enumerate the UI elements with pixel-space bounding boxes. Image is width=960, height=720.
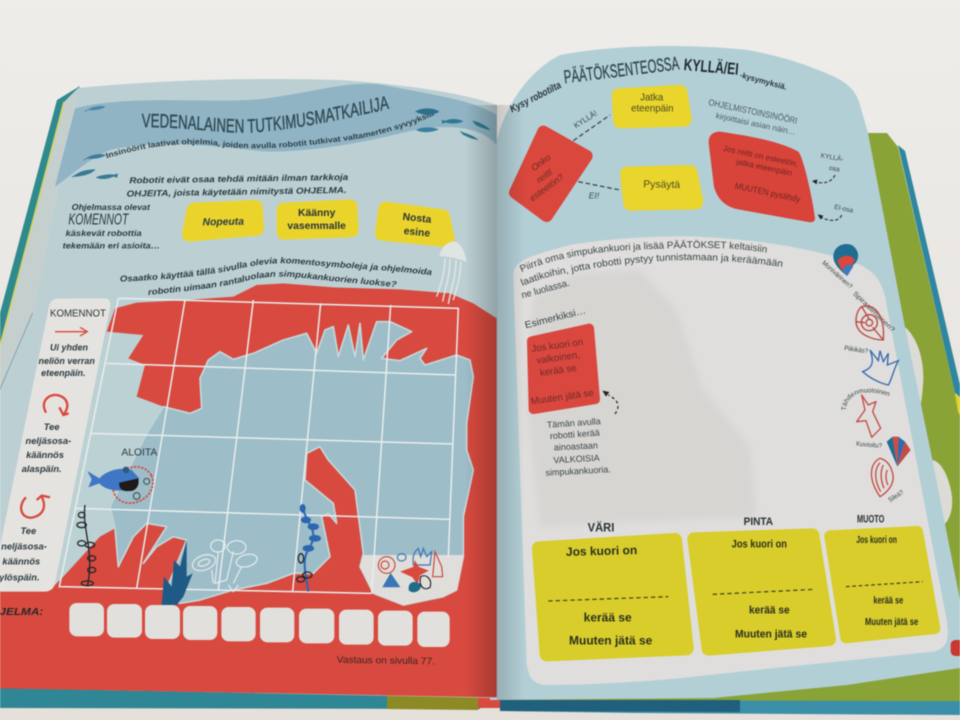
command: Käänny vasemmalle: vasemmalle	[287, 221, 346, 232]
no-part note: EI-osa	[833, 204, 854, 215]
black seaweed	[77, 505, 96, 587]
code box	[709, 132, 815, 222]
box: Jatka eteenpäin: Jatka	[640, 92, 664, 103]
software engineer note: kirjoittaisi asian näin…	[715, 111, 797, 137]
icon: turn up arrow	[21, 496, 50, 518]
white coral	[190, 540, 259, 592]
example label: Esimerkiksi…	[524, 305, 587, 331]
komennot intro: tekemään eri asioita…	[63, 240, 160, 250]
instructions: ne luolassa.	[520, 278, 571, 301]
blue seaweed	[297, 505, 320, 592]
left page	[0, 79, 497, 698]
decision diamond: reitti	[534, 166, 555, 185]
software engineer note: OHJELMISTOINSINÖÖRI	[708, 97, 798, 126]
red rock	[0, 283, 497, 697]
column: surface	[694, 516, 829, 649]
column: shape: MUOTO	[857, 514, 884, 526]
decision diamond	[515, 132, 587, 216]
column: surface: Muuten jätä se	[735, 629, 807, 641]
shallow water	[53, 332, 163, 587]
command: Nosta esine: Nosta	[402, 212, 432, 226]
column: shape: Muuten jätä se	[865, 617, 919, 628]
label: no: EI!	[589, 191, 600, 201]
curved label: star shaped	[840, 388, 890, 410]
commands side panel: Ui yhden	[50, 343, 88, 353]
instructions: laatikoihin, jotta robotti pystyy tunnistamaan ja keräämään	[520, 252, 783, 286]
dark seaweed	[162, 540, 193, 605]
commands side panel: neljäsosa-	[1, 541, 47, 551]
shell property labels and icons: Monivärinen?	[820, 260, 854, 291]
dashed pointer	[602, 391, 618, 414]
command: Nopeuta	[189, 207, 257, 234]
column: shape: Jos kuori on	[856, 535, 897, 546]
jellyfish	[437, 242, 467, 304]
school of fish	[71, 106, 491, 179]
icon: scallop	[887, 437, 911, 467]
commands side panel	[0, 298, 110, 592]
commands side panel: ylöspäin.	[0, 572, 40, 582]
robot fish start	[87, 460, 159, 510]
example explanation: VALKOISIA	[553, 453, 600, 465]
command: Nosta esine	[382, 209, 448, 240]
box: Pysäytä	[627, 172, 696, 203]
commands side panel: neljäsosa-	[26, 436, 71, 446]
curved label: star shaped: Tähdenmuotoinen?	[840, 388, 890, 410]
example explanation: simpukankuoria.	[545, 464, 611, 478]
left page crease shadow	[465, 105, 497, 697]
shell property labels and icons: Piikikäs?	[844, 345, 869, 355]
column: surface: PINTA	[744, 516, 773, 528]
sand pocket	[360, 555, 464, 605]
decision diamond: Onko	[529, 152, 553, 173]
code box: MUUTEN pysähdy	[734, 181, 802, 204]
commands side panel: käännös	[26, 450, 64, 460]
answer note: Vastaus on sivulla 77.	[337, 655, 435, 667]
command: Käänny vasemmalle	[284, 207, 351, 232]
commands side panel: eteenpäin.	[41, 368, 86, 378]
no-part note	[818, 204, 854, 220]
shell property labels and icons: Sileä?	[887, 489, 905, 504]
example red box: Muuten jätä se	[530, 388, 594, 407]
left page upper content	[62, 96, 490, 296]
komennot intro	[63, 202, 160, 250]
komennot intro: käskevät robottia	[66, 228, 142, 238]
code box: jatka eteenpäin	[735, 157, 793, 178]
shell property labels and icons: Spiraalimainen?	[851, 290, 896, 334]
shell pile goal	[378, 548, 443, 592]
commands side panel: Tee	[44, 422, 60, 432]
icon: smooth clam	[871, 458, 893, 497]
instructions	[519, 239, 783, 301]
column: surface: kerää se	[749, 604, 790, 616]
intro text: OHJEITA, joista käytetään nimitystä OHJELMA.	[127, 185, 347, 199]
column: shape: kerää se	[873, 596, 904, 607]
right page white activity panel	[513, 236, 948, 685]
panel shadow	[527, 270, 757, 527]
example red box: kerää se	[539, 363, 577, 379]
commands side panel: KOMENNOT	[50, 309, 106, 320]
heading	[508, 52, 788, 115]
icon: forward arrow	[55, 327, 87, 336]
yes-part note: KYLLÄ-	[820, 151, 844, 163]
column: colour: VÄRI	[588, 519, 614, 534]
dashed yes and no connectors	[573, 115, 620, 190]
heading: KYLLÄ/EI	[683, 55, 739, 79]
column: colour: Jos kuori on	[566, 543, 637, 559]
code box: Jos reitti on esteetön,	[722, 144, 799, 169]
command: Nopeuta: Nopeuta	[203, 217, 244, 228]
box: Jatka eteenpäin: eteenpäin	[631, 103, 674, 114]
yes-part note: osa	[828, 165, 840, 174]
example explanation: ainoastaan	[554, 440, 598, 452]
commands side panel: Tee	[20, 526, 36, 536]
start label: ALOITA	[121, 448, 157, 459]
right page decision diagram	[508, 52, 854, 222]
intro text	[127, 172, 349, 199]
komennot intro: Ohjelmassa olevat	[72, 202, 151, 212]
komennot intro: KOMENNOT	[68, 212, 129, 229]
example red box: valkoinen,	[536, 350, 581, 367]
yes-part note	[812, 151, 844, 184]
heading: Kysy robotilta	[508, 80, 563, 115]
shell property labels and icons: Kuvioitu?	[856, 441, 883, 450]
commands side panel: neliön verran	[38, 356, 95, 366]
top wave band	[55, 84, 497, 187]
page number tab	[951, 640, 960, 656]
subtitle: Insinöörit laativat ohjelmia, joiden avulla robotit tutkivat valtamerten syvyyksiä	[105, 114, 434, 159]
shell property labels and icons	[758, 212, 912, 504]
right page	[490, 46, 960, 700]
example red box: Jos kuori on	[531, 337, 584, 355]
command: Käänny vasemmalle: Käänny	[298, 208, 336, 219]
column: colour: kerää se	[584, 611, 632, 625]
command: Nosta esine: esine	[403, 226, 431, 240]
icon: turn down arrow	[44, 395, 69, 415]
question text: robotin uimaan rantaluolaan simpukankuorien luokse?	[148, 270, 398, 296]
heading: -kysymyksiä.	[739, 71, 788, 92]
commands side panel: alaspäin.	[22, 464, 62, 474]
right page crease shadow	[497, 105, 525, 700]
column: colour: Muuten jätä se	[569, 634, 653, 648]
heading: PÄÄTÖKSENTEOSSA	[563, 52, 681, 87]
red seabed and cave map	[0, 283, 497, 697]
intro text: Robotit eivät osaa tehdä mitään ilman tarkkoja	[129, 172, 349, 185]
example red box	[530, 328, 595, 409]
example explanation: Tämän avulla	[547, 416, 601, 430]
cave water	[110, 322, 473, 605]
program slots	[69, 603, 450, 647]
title: VEDENALAINEN TUTKIMUSMATKAILIJA	[141, 96, 390, 134]
grid	[59, 298, 458, 593]
icon: spiral shell	[856, 306, 884, 340]
icon: starfish	[857, 395, 881, 437]
question text: Osaatko käyttää tällä sivulla olevia komentosymboleja ja ohjelmoida	[120, 256, 432, 282]
commands side panel: käännös	[2, 557, 40, 567]
icon: multicoloured shell	[833, 244, 858, 276]
icon: spiky coral	[863, 350, 898, 385]
example explanation: robotti kerää	[550, 428, 600, 441]
instructions: Piirrä oma simpukankuori ja lisää PÄÄTÖKSET keltaisiin	[519, 239, 768, 272]
column: shape	[830, 514, 935, 638]
example explanation	[545, 416, 611, 478]
question text	[120, 256, 432, 296]
label: yes: KYLLÄ!	[572, 109, 599, 130]
column: surface: Jos kuori on	[732, 538, 787, 550]
box: Pysäytä: Pysäytä	[643, 179, 680, 191]
column: colour	[539, 519, 687, 654]
decision diamond: esteetön?	[528, 172, 565, 203]
activity panel content	[519, 212, 960, 662]
box: Jatka eteenpäin	[619, 92, 684, 121]
